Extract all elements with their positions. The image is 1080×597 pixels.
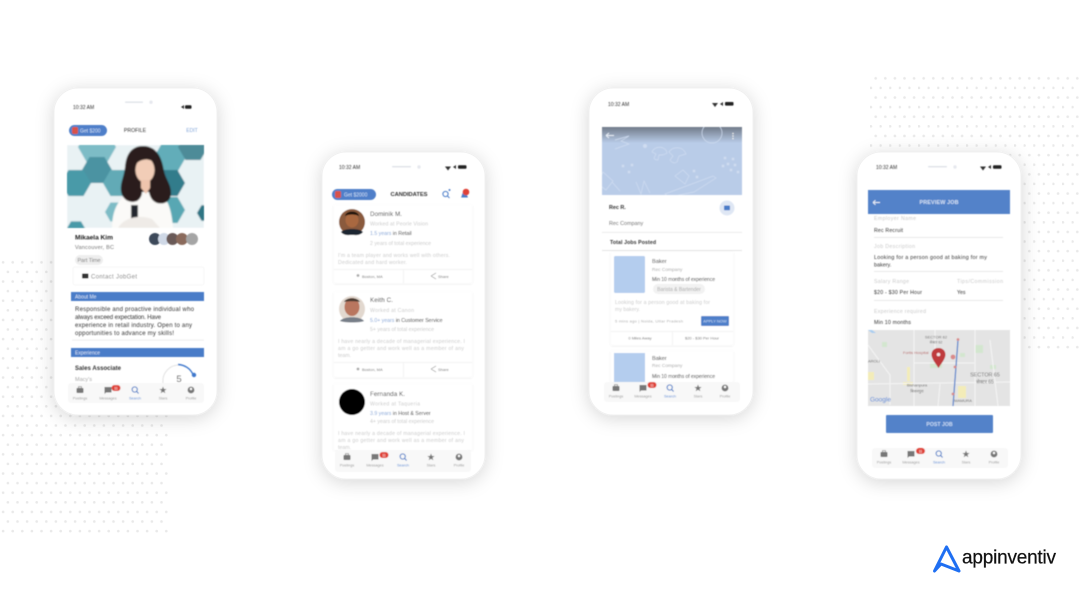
heading: candidates: CANDIDATES: [390, 192, 428, 198]
edit link: EDIT: [186, 128, 198, 134]
map labels: MAMURA: [954, 398, 972, 403]
bottom navigation: Stars: [159, 397, 168, 401]
bottom navigation: 11: [114, 386, 118, 390]
panel: experience: [71, 348, 204, 385]
salary and tips fields: Yes: [957, 290, 966, 296]
map: [868, 330, 1010, 406]
status bar: 10:32 AM: [73, 105, 94, 111]
panel: candidate card 2: Boston, MA: [362, 367, 383, 372]
recruiter info: Rec R.: [609, 205, 626, 211]
map labels: Fortis Hospital: [903, 350, 929, 355]
panel: candidate card 2: 5.0+ years in Customer Service: [370, 318, 443, 324]
bottom navigation: 11: [919, 449, 922, 453]
panel: job card 1: my bakery.: [615, 307, 640, 313]
panel: experience: Sales Associate: [75, 366, 122, 372]
panel: candidate card 3: [334, 384, 472, 451]
panel: job card 1: [611, 252, 733, 345]
bottom navigation: [872, 448, 1008, 468]
panel: candidate card 1: 2 years of total experience: [370, 241, 431, 247]
panel: candidate card 2: 5+ years of total experience: [370, 327, 434, 333]
bottom navigation: Postings: [73, 397, 87, 401]
back arrow: [606, 133, 614, 138]
referral pill: Get $2000: [344, 192, 368, 198]
bottom navigation: [604, 382, 740, 402]
panel: candidate card 1: Worked at Peorle Vision: [370, 222, 428, 228]
panel: job card 2: Rec Company: [652, 363, 683, 369]
status bar: [73, 100, 192, 111]
bottom navigation: Search: [397, 464, 409, 468]
experience field: [874, 309, 926, 326]
food illustration banner: [598, 123, 742, 197]
post job button: [886, 415, 993, 433]
recruiter info: Rec Company: [609, 221, 643, 227]
bottom navigation: Profile: [454, 464, 464, 468]
panel: candidate card 2: am a go getter and work well as a member of any: [338, 346, 464, 352]
background dot pattern: right: [870, 73, 1080, 352]
bottom navigation: Search: [664, 395, 676, 399]
bottom navigation: Stars: [962, 461, 971, 465]
panel: job card 1: Rec Company: [652, 267, 683, 273]
panel: candidate card 1: Share: [438, 274, 449, 279]
status bar: [876, 165, 1002, 171]
avatar: [339, 209, 365, 235]
panel: candidate card 3: Fernanda K.: [370, 391, 405, 398]
background dot pattern: left: [0, 257, 169, 533]
google logo: Google: [870, 396, 891, 404]
phone: preview job screen: [857, 152, 1021, 479]
employer field: [874, 216, 1003, 238]
panel: candidate card 3: 3.9 years in Host & Server: [370, 411, 431, 417]
bottom navigation: Profile: [720, 395, 730, 399]
bottom navigation: [335, 450, 471, 472]
experience field: Min 10 months: [874, 320, 911, 326]
panel: about me: [71, 292, 204, 341]
avatar: [339, 296, 365, 322]
name and location: Vancouver, BC: [75, 245, 114, 251]
experience gauge: 5: [176, 374, 182, 385]
heading: total jobs posted: Total Jobs Posted: [610, 240, 656, 246]
heading: profile: PROFILE: [124, 128, 147, 134]
bottom navigation: Postings: [609, 395, 623, 399]
avatar: [339, 389, 365, 415]
contact button: Contact JobGet: [91, 274, 137, 280]
salary and tips fields: $20 - $30 Per Hour: [874, 290, 922, 296]
employer field: Employer Name: [874, 216, 916, 222]
phone: profile screen: [54, 88, 217, 415]
bottom navigation: [68, 383, 204, 403]
panel: job card 1: Looking for a person good at baking for: [615, 300, 710, 306]
bottom navigation: Profile: [186, 397, 196, 401]
panel: candidate card 3: team.: [338, 445, 351, 451]
panel: candidate card 2: Keith C.: [370, 297, 393, 304]
profile photo: [66, 144, 205, 229]
panel: candidate card 3: I have nearly a decade of managerial experience. I: [338, 431, 465, 437]
panel: candidate card 1: [334, 205, 472, 283]
icon: logo triangle: [934, 547, 959, 571]
map labels: SECTOR 62: [925, 334, 948, 340]
bottom navigation: Stars: [427, 464, 436, 468]
phone: candidates screen: [322, 152, 485, 479]
panel: job card 1: 5 mins ago | Noida, Uttar Pradesh: [615, 318, 683, 324]
experience field: Experience required: [874, 309, 926, 315]
panel: job card 1: Min 10 months of experience: [652, 277, 715, 283]
map labels: [868, 334, 1000, 403]
bottom navigation: Search: [129, 397, 141, 401]
panel: job card 1: Barista & Bartender: [657, 287, 701, 293]
logo: appinventiv: [934, 547, 1056, 571]
panel: job card 1: Baker: [652, 259, 667, 265]
panel: experience: Experience: [75, 350, 100, 356]
referral pill: [332, 189, 376, 200]
employer field: Rec Recruit: [874, 228, 904, 234]
bottom navigation: Search: [933, 461, 945, 465]
panel: about me: About Me: [75, 294, 97, 300]
panel: job card 1: $20 - $30 Per Hour: [685, 336, 720, 341]
search and bell icons: [443, 189, 469, 198]
status bar: [339, 165, 466, 171]
map labels: सेक्टर 62: [930, 340, 942, 344]
bottom navigation: Postings: [340, 464, 354, 468]
bottom navigation: Messages: [634, 395, 652, 399]
panel: candidate card 3: am a go getter and work well as a member of any: [338, 438, 464, 444]
job description field: Job Description: [874, 244, 915, 250]
panel: candidate card 2: Worked at Canon: [370, 308, 414, 314]
panel: candidate card 2: Share: [438, 367, 449, 372]
referral pill: Get $200: [80, 128, 101, 134]
bottom navigation: Stars: [694, 395, 703, 399]
panel: candidate card 2: I have nearly a decade of managerial experience. I: [338, 339, 465, 345]
salary and tips fields: Tips/Commission: [957, 279, 1003, 285]
header bar: preview job: [868, 190, 1010, 214]
part time chip: [75, 255, 103, 265]
panel: about me: experience in retail industry. Open to any: [75, 323, 192, 329]
map labels: AROLI: [868, 358, 880, 364]
panel: candidate card 2: team.: [338, 353, 351, 359]
panel: candidate card 1: Boston, MA: [362, 274, 383, 279]
panel: job card 2: Min 10 months of experience: [652, 374, 715, 380]
map labels: Bishanpura: [907, 382, 928, 388]
name and location: [75, 234, 114, 251]
panel: candidate card 3: Worked at Taqueria: [370, 402, 420, 408]
salary and tips fields: [874, 279, 1003, 301]
panel: candidate card 1: I'm a team player and works well with others.: [338, 253, 450, 259]
panel: job card 2: Baker: [652, 356, 667, 362]
logo: appinventiv: appinventiv: [962, 548, 1056, 568]
panel: about me: opportunities to advance my skills!: [75, 331, 174, 337]
bottom navigation: Messages: [99, 397, 117, 401]
map labels: बिशनपुरा: [910, 388, 925, 394]
post job button: POST JOB: [926, 422, 953, 428]
job description field: Looking for a person good at baking for my: [874, 255, 987, 261]
status bar: 10:32 AM: [876, 165, 897, 171]
map pin: [932, 348, 946, 368]
phone: recruiter jobs screen: [589, 88, 753, 415]
status bar: [608, 102, 734, 108]
panel: candidate card 1: Dedicated and hard worker.: [338, 260, 407, 266]
panel: candidate card 1: Dominik M.: [370, 211, 402, 218]
map labels: सेक्टर 65: [976, 378, 994, 386]
more menu: [732, 133, 734, 139]
map labels: SECTOR 65: [970, 372, 1000, 378]
bottom navigation: Postings: [877, 461, 891, 465]
bottom navigation: Messages: [366, 464, 384, 468]
panel: experience: Macy's: [75, 377, 92, 383]
job description field: bakery.: [874, 262, 891, 268]
bottom navigation: 11: [382, 453, 386, 457]
panel: candidate card 2: [334, 292, 472, 377]
part time chip: Part Time: [77, 258, 101, 264]
panel: job card 2: [611, 351, 733, 383]
panel: job card 1: APPLY NOW: [703, 319, 727, 324]
panel: candidate card 3: 4+ years of total experience: [370, 419, 434, 425]
bottom navigation: Messages: [902, 461, 920, 465]
panel: about me: Responsible and proactive individual who: [75, 307, 195, 313]
salary and tips fields: Salary Range: [874, 279, 909, 285]
name and location: Mikaela Kim: [75, 234, 113, 242]
avatars: [149, 233, 198, 245]
bottom navigation: Profile: [989, 461, 999, 465]
status bar: 10:32 AM: [339, 165, 360, 171]
panel: about me: always exceed expectation. Have: [75, 315, 162, 321]
contact button: [73, 267, 204, 285]
panel: candidate card 1: 1.5 years in Retail: [370, 231, 412, 237]
status bar: 10:32 AM: [608, 102, 629, 108]
job description field: [874, 244, 1003, 272]
header bar: preview job: PREVIEW JOB: [920, 200, 959, 206]
panel: job card 1: 0 Miles Away: [628, 336, 652, 341]
recruiter info: [602, 200, 742, 233]
referral pill: [69, 125, 107, 136]
bottom navigation: 11: [650, 383, 654, 387]
